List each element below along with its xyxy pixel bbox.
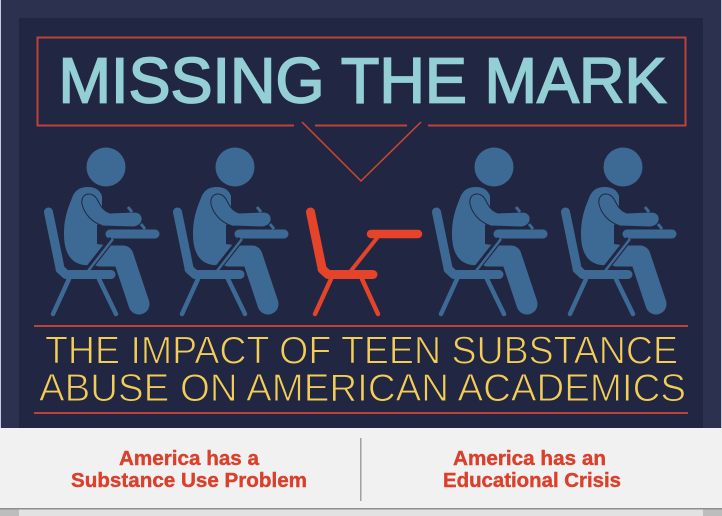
student 3 bbox=[436, 148, 543, 314]
white navigation panel bbox=[0, 428, 722, 508]
tab: educational crisis bbox=[443, 447, 621, 492]
subtitle rule top bbox=[34, 325, 688, 327]
empty red desk bbox=[310, 212, 418, 314]
arrow pointing to empty desk bbox=[302, 122, 421, 181]
subtitle rule bottom bbox=[34, 412, 688, 414]
subtitle bbox=[39, 330, 686, 410]
tab: substance use problem: Substance Use Problem bbox=[71, 469, 307, 492]
divider bbox=[360, 438, 362, 501]
inner dark panel bbox=[19, 18, 703, 428]
student 1 bbox=[48, 148, 155, 314]
tab: educational crisis: Educational Crisis bbox=[443, 469, 621, 492]
tab: substance use problem: America has a bbox=[119, 447, 260, 470]
title frame bbox=[38, 38, 686, 126]
tab: educational crisis: America has an bbox=[453, 447, 606, 470]
subtitle: THE IMPACT OF TEEN SUBSTANCE bbox=[45, 330, 678, 372]
student 4 bbox=[566, 148, 672, 314]
tab: substance use problem bbox=[71, 447, 307, 492]
title: MISSING THE MARK bbox=[58, 44, 666, 116]
student 2 bbox=[178, 148, 284, 314]
subtitle: ABUSE ON AMERICAN ACADEMICS bbox=[39, 367, 686, 410]
footer strip below panel bbox=[0, 508, 722, 516]
